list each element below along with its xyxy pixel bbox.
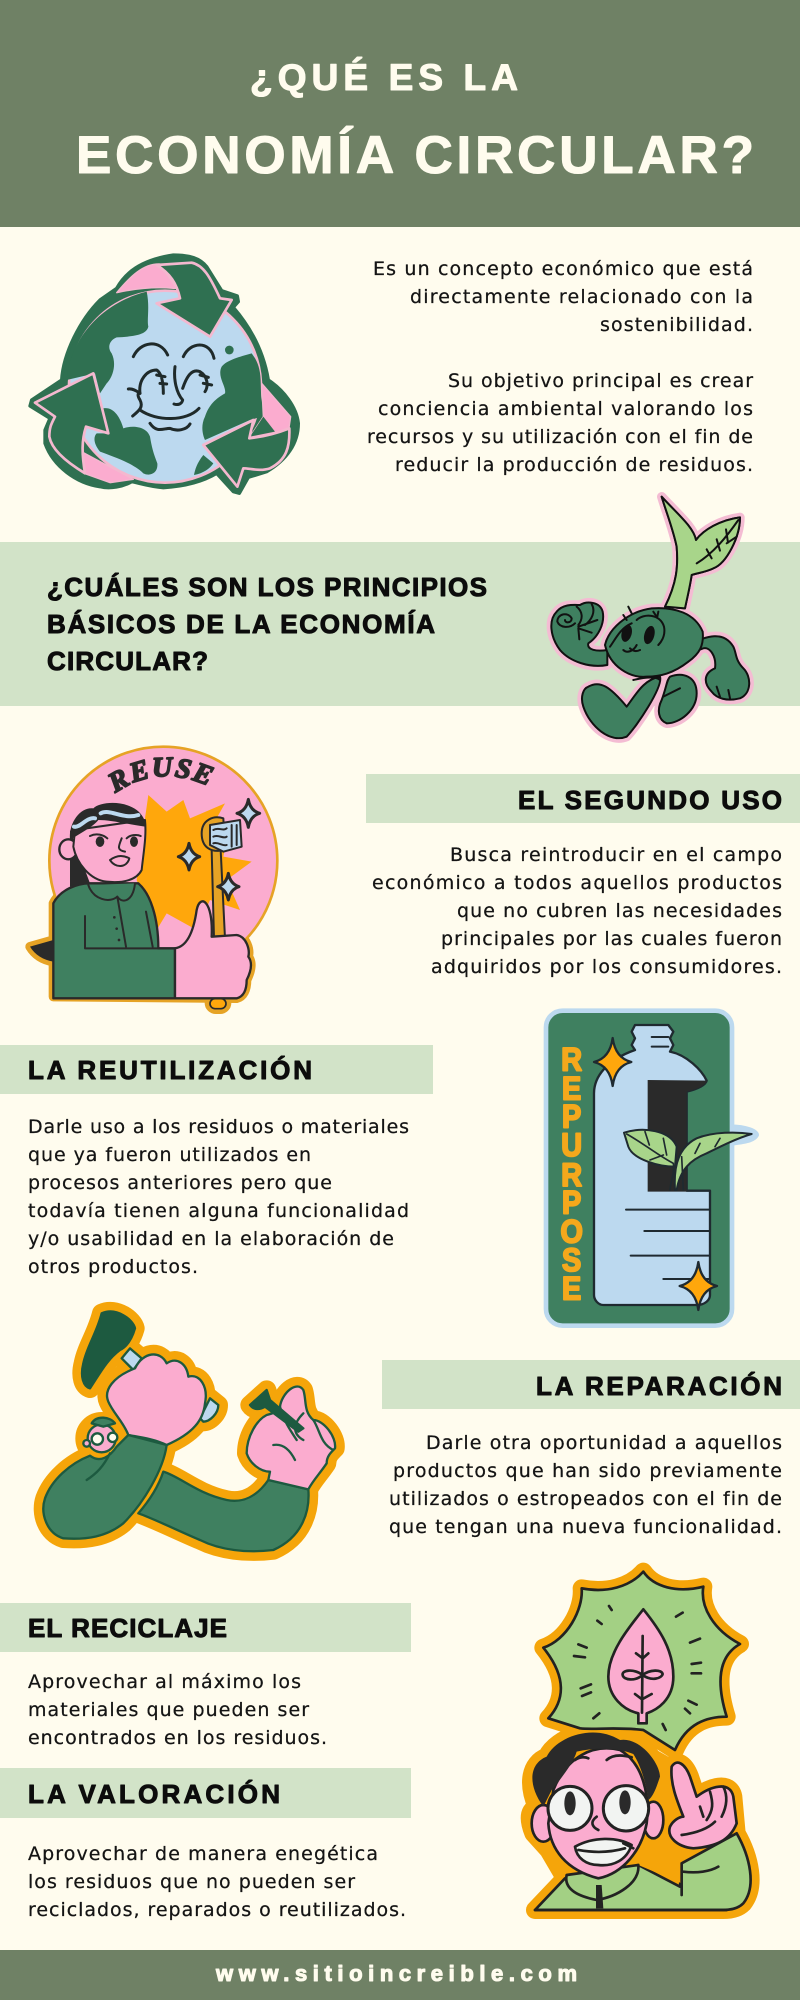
text: valoración description: los residuos que no pueden ser bbox=[28, 1871, 355, 1893]
panel: el segundo uso bbox=[366, 774, 800, 978]
intro text block: sostenibilidad. bbox=[600, 314, 753, 336]
intro text block: directamente relacionado con la bbox=[410, 286, 753, 308]
text: reparación description: utilizados o estropeados con el fin de bbox=[389, 1488, 782, 1510]
text: reutilización description: procesos anteriores pero que bbox=[28, 1172, 332, 1194]
heading: principles bbox=[47, 572, 487, 676]
text: REPURPOSE: R bbox=[561, 1158, 582, 1193]
text: segundo uso description: que no cubren las necesidades bbox=[457, 900, 782, 922]
text: segundo uso description: principales por las cuales fueron bbox=[441, 928, 782, 950]
panel: la reparación bbox=[382, 1360, 800, 1538]
icon: smiling earth with recycling arrows bbox=[30, 255, 298, 493]
text: REPURPOSE: E bbox=[562, 1271, 581, 1307]
text: reciclaje description bbox=[28, 1671, 327, 1749]
heading: el reciclaje: EL RECICLAJE bbox=[28, 1613, 227, 1643]
text: reparación description: que tengan una nueva funcionalidad. bbox=[389, 1516, 782, 1538]
intro text block: Es un concepto económico que está bbox=[373, 258, 753, 280]
title bbox=[76, 57, 754, 185]
panel: la reutilización bbox=[0, 1045, 433, 1278]
text: reutilización description bbox=[28, 1116, 409, 1278]
icon: arms with hammer and nail bbox=[43, 1312, 335, 1551]
text: REPURPOSE: E bbox=[562, 1071, 581, 1107]
intro text block: recursos y su utilización con el fin de bbox=[367, 426, 753, 448]
text: reparación description: productos que han sido previamente bbox=[393, 1460, 782, 1482]
text: reutilización description: y/o usabilidad en la elaboración de bbox=[28, 1228, 394, 1250]
text: reutilización description: todavía tienen alguna funcionalidad bbox=[28, 1200, 409, 1222]
text: REPURPOSE: O bbox=[560, 1214, 583, 1250]
text: reparación description: Darle otra oportunidad a aquellos bbox=[426, 1432, 782, 1454]
text: segundo uso description: Busca reintroducir en el campo bbox=[450, 844, 782, 866]
text: reciclaje description: materiales que pueden ser bbox=[28, 1699, 309, 1721]
heading: principles: CIRCULAR? bbox=[47, 646, 208, 676]
text: reutilización description: que ya fueron utilizados en bbox=[28, 1144, 311, 1166]
text: reutilización description: Darle uso a los residuos o materiales bbox=[28, 1116, 409, 1138]
panel: la valoración bbox=[0, 1768, 411, 1921]
text: segundo uso description: adquiridos por los consumidores. bbox=[431, 956, 782, 978]
title: ECONOMÍA CIRCULAR? bbox=[76, 125, 754, 185]
footer url: www.sitioincreible.com bbox=[215, 1961, 577, 1986]
intro text block bbox=[367, 258, 753, 476]
text: valoración description bbox=[28, 1843, 406, 1921]
header panel bbox=[0, 0, 800, 227]
title: ¿QUÉ ES LA bbox=[250, 57, 518, 98]
intro text block: reducir la producción de residuos. bbox=[395, 454, 753, 476]
intro text block: Su objetivo principal es crear bbox=[448, 370, 753, 392]
text: reparación description bbox=[389, 1432, 782, 1538]
text: valoración description: Aprovechar de manera enegética bbox=[28, 1843, 378, 1865]
icon: running sprout character bbox=[551, 497, 749, 738]
footer band bbox=[0, 1950, 800, 2000]
text: REPURPOSE: P bbox=[562, 1185, 581, 1221]
heading: el segundo uso: EL SEGUNDO USO bbox=[518, 785, 782, 815]
text: segundo uso description: económico a todos aquellos productos bbox=[372, 872, 782, 894]
text: reciclaje description: encontrados en los residuos. bbox=[28, 1727, 327, 1749]
heading: principles: ¿CUÁLES SON LOS PRINCIPIOS bbox=[47, 572, 487, 602]
text: reutilización description: otros productos. bbox=[28, 1256, 198, 1278]
text: segundo uso description bbox=[372, 844, 782, 978]
heading: la reparación: LA REPARACIÓN bbox=[536, 1371, 782, 1401]
icon: man pointing with leaf idea bbox=[530, 1572, 751, 1910]
text: REPURPOSE bbox=[560, 1042, 583, 1307]
text: REUSE: REUSE bbox=[108, 756, 215, 794]
panel: principles heading band bbox=[0, 542, 800, 706]
heading: principles: BÁSICOS DE LA ECONOMÍA bbox=[47, 609, 435, 639]
icon: repurpose bottle badge bbox=[546, 1011, 757, 1326]
text: REPURPOSE: P bbox=[562, 1099, 581, 1135]
intro text block: conciencia ambiental valorando los bbox=[378, 398, 753, 420]
text: REPURPOSE: U bbox=[561, 1128, 582, 1163]
panel: el reciclaje bbox=[0, 1603, 411, 1749]
heading: la valoración: LA VALORACIÓN bbox=[28, 1779, 280, 1809]
text: valoración description: reciclados, reparados o reutilizados. bbox=[28, 1899, 406, 1921]
text: reciclaje description: Aprovechar al máximo los bbox=[28, 1671, 301, 1693]
text: REPURPOSE: S bbox=[562, 1243, 581, 1278]
icon: reuse badge with toothbrush bbox=[25, 745, 279, 1014]
text: REPURPOSE: R bbox=[561, 1042, 582, 1078]
heading: la reutilización: LA REUTILIZACIÓN bbox=[28, 1055, 312, 1085]
